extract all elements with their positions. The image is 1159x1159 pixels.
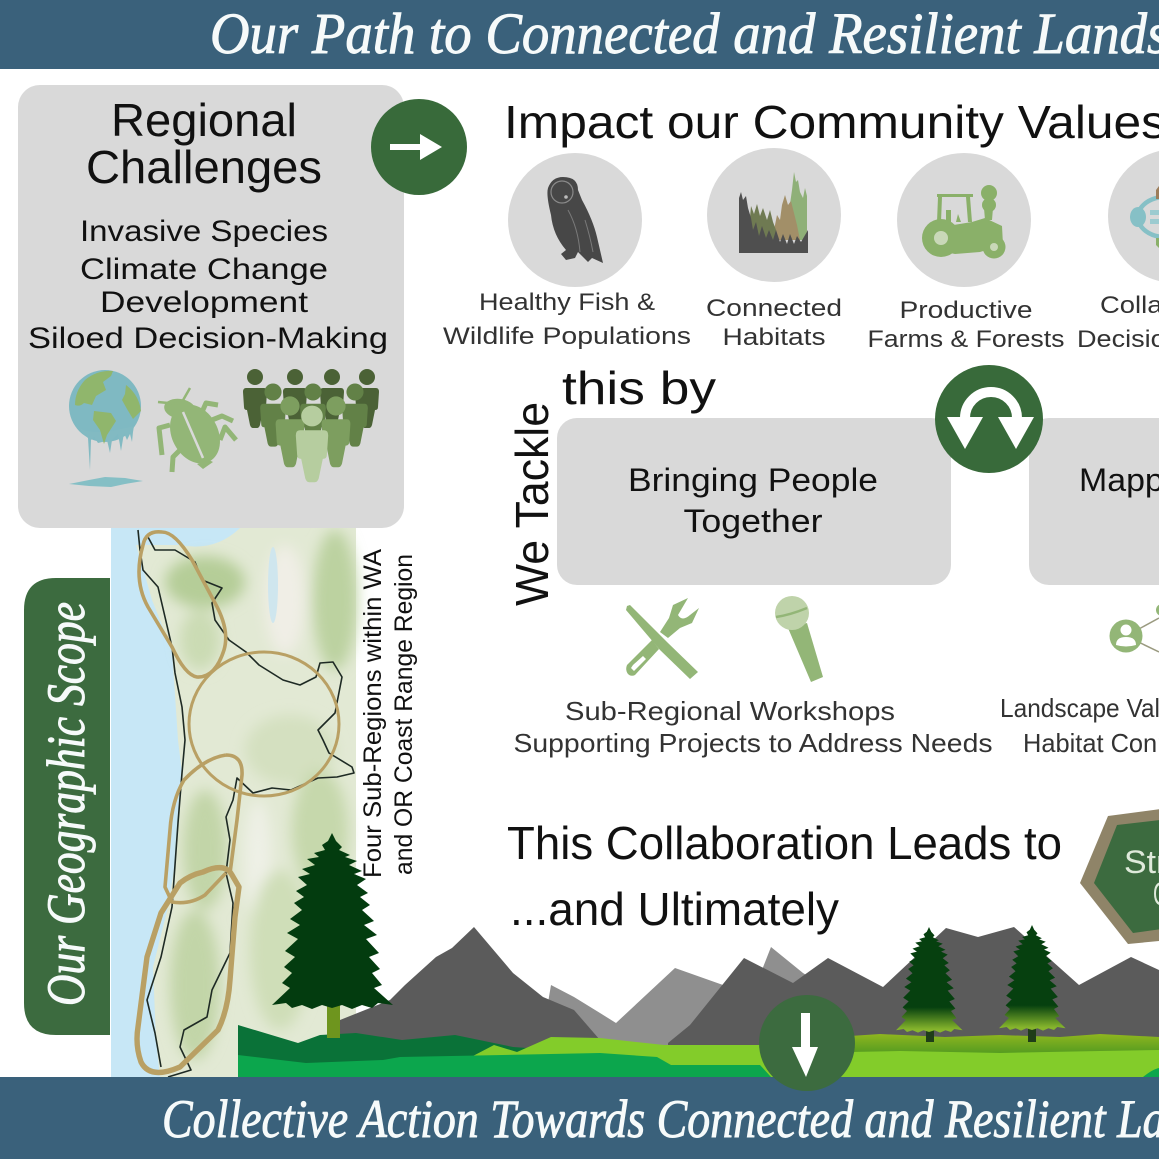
sub-region outlines [137, 532, 339, 1072]
icon: melting globe [69, 370, 143, 487]
label: collaborative decision-making [1077, 292, 1159, 353]
panel: bringing people together [557, 418, 951, 585]
landscape: small fir trees [896, 925, 1066, 1042]
icon: beetle [158, 388, 236, 472]
value: productive farms and forests [868, 153, 1064, 353]
footer banner [0, 1077, 1159, 1159]
heading: impact our community values: Impact our Community Values [504, 96, 1159, 148]
panel: regional challenges [18, 85, 404, 528]
landscape: large fir tree [272, 833, 393, 1038]
challenge list: Siloed Decision-Making [28, 322, 388, 355]
challenge list: Invasive Species [80, 215, 328, 248]
label: connected habitats: Connected [706, 295, 842, 322]
icon: network [1110, 604, 1159, 652]
label: productive farms: Productive [900, 297, 1032, 324]
landscape: ground [238, 1025, 1159, 1077]
icon: group of people [243, 369, 379, 482]
landscape: mountains [340, 927, 1159, 1050]
header banner [0, 0, 1159, 69]
regional boundary lines [138, 530, 354, 1077]
icon: tractor [922, 185, 1006, 258]
icon: forest [739, 172, 808, 253]
panel: geographic scope tab [24, 578, 110, 1035]
label: healthy populations: Wildlife Populations [443, 323, 691, 350]
label: healthy populations: Healthy Fish & [479, 289, 655, 316]
heading: we tackle this by: We Tackle [506, 402, 558, 606]
panel: mapping [1029, 418, 1159, 585]
map caption [359, 549, 418, 878]
heading: regional challenges: Challenges [86, 141, 322, 193]
hexagon callout [1080, 808, 1159, 944]
heading: we tackle this by: this by [562, 362, 716, 414]
map caption: and OR Coast Range Region [390, 554, 418, 875]
label: healthy populations [443, 289, 691, 350]
workshop text: Supporting Projects to Address Needs [514, 728, 992, 758]
workshop text [514, 696, 992, 758]
label: productive farms: Farms & Forests [868, 326, 1064, 353]
workshop text: Sub-Regional Workshops [565, 696, 895, 726]
value: connected habitats [706, 148, 842, 351]
challenge list [28, 215, 388, 355]
icon: owl [547, 177, 603, 263]
heading: collaboration leads to [507, 817, 1062, 935]
heading: collaboration leads to: This Collaboration Leads to [507, 817, 1062, 869]
label: productive farms [868, 297, 1064, 353]
icon: collaboration [1130, 186, 1159, 248]
geographic scope label: Our Geographic Scope [36, 602, 96, 1006]
panel: bringing people together: Bringing People [628, 462, 878, 498]
challenge list: Development [100, 286, 309, 319]
heading: collaboration leads to: ...and Ultimately [510, 883, 839, 935]
mapping text [1000, 693, 1159, 758]
map: geographic scope [111, 528, 357, 1077]
challenge list: Climate Change [80, 253, 328, 286]
map caption: Four Sub-Regions within WA [359, 549, 387, 878]
label: connected habitats [706, 295, 842, 351]
heading: we tackle this by [506, 362, 716, 606]
panel: bringing people together: Together [684, 503, 823, 539]
label: connected habitats: Habitats [722, 324, 826, 351]
heading: regional challenges [86, 94, 322, 193]
heading: regional challenges: Regional [111, 94, 297, 146]
value: healthy populations [443, 153, 691, 350]
arrow: reciprocal loop [935, 365, 1043, 473]
icon: microphone [775, 596, 823, 682]
icon: tools [626, 598, 699, 679]
arrow: challenges to values [371, 99, 467, 195]
value: collaborative decision-making [1077, 149, 1159, 353]
arrow: down to outcome [759, 995, 855, 1091]
